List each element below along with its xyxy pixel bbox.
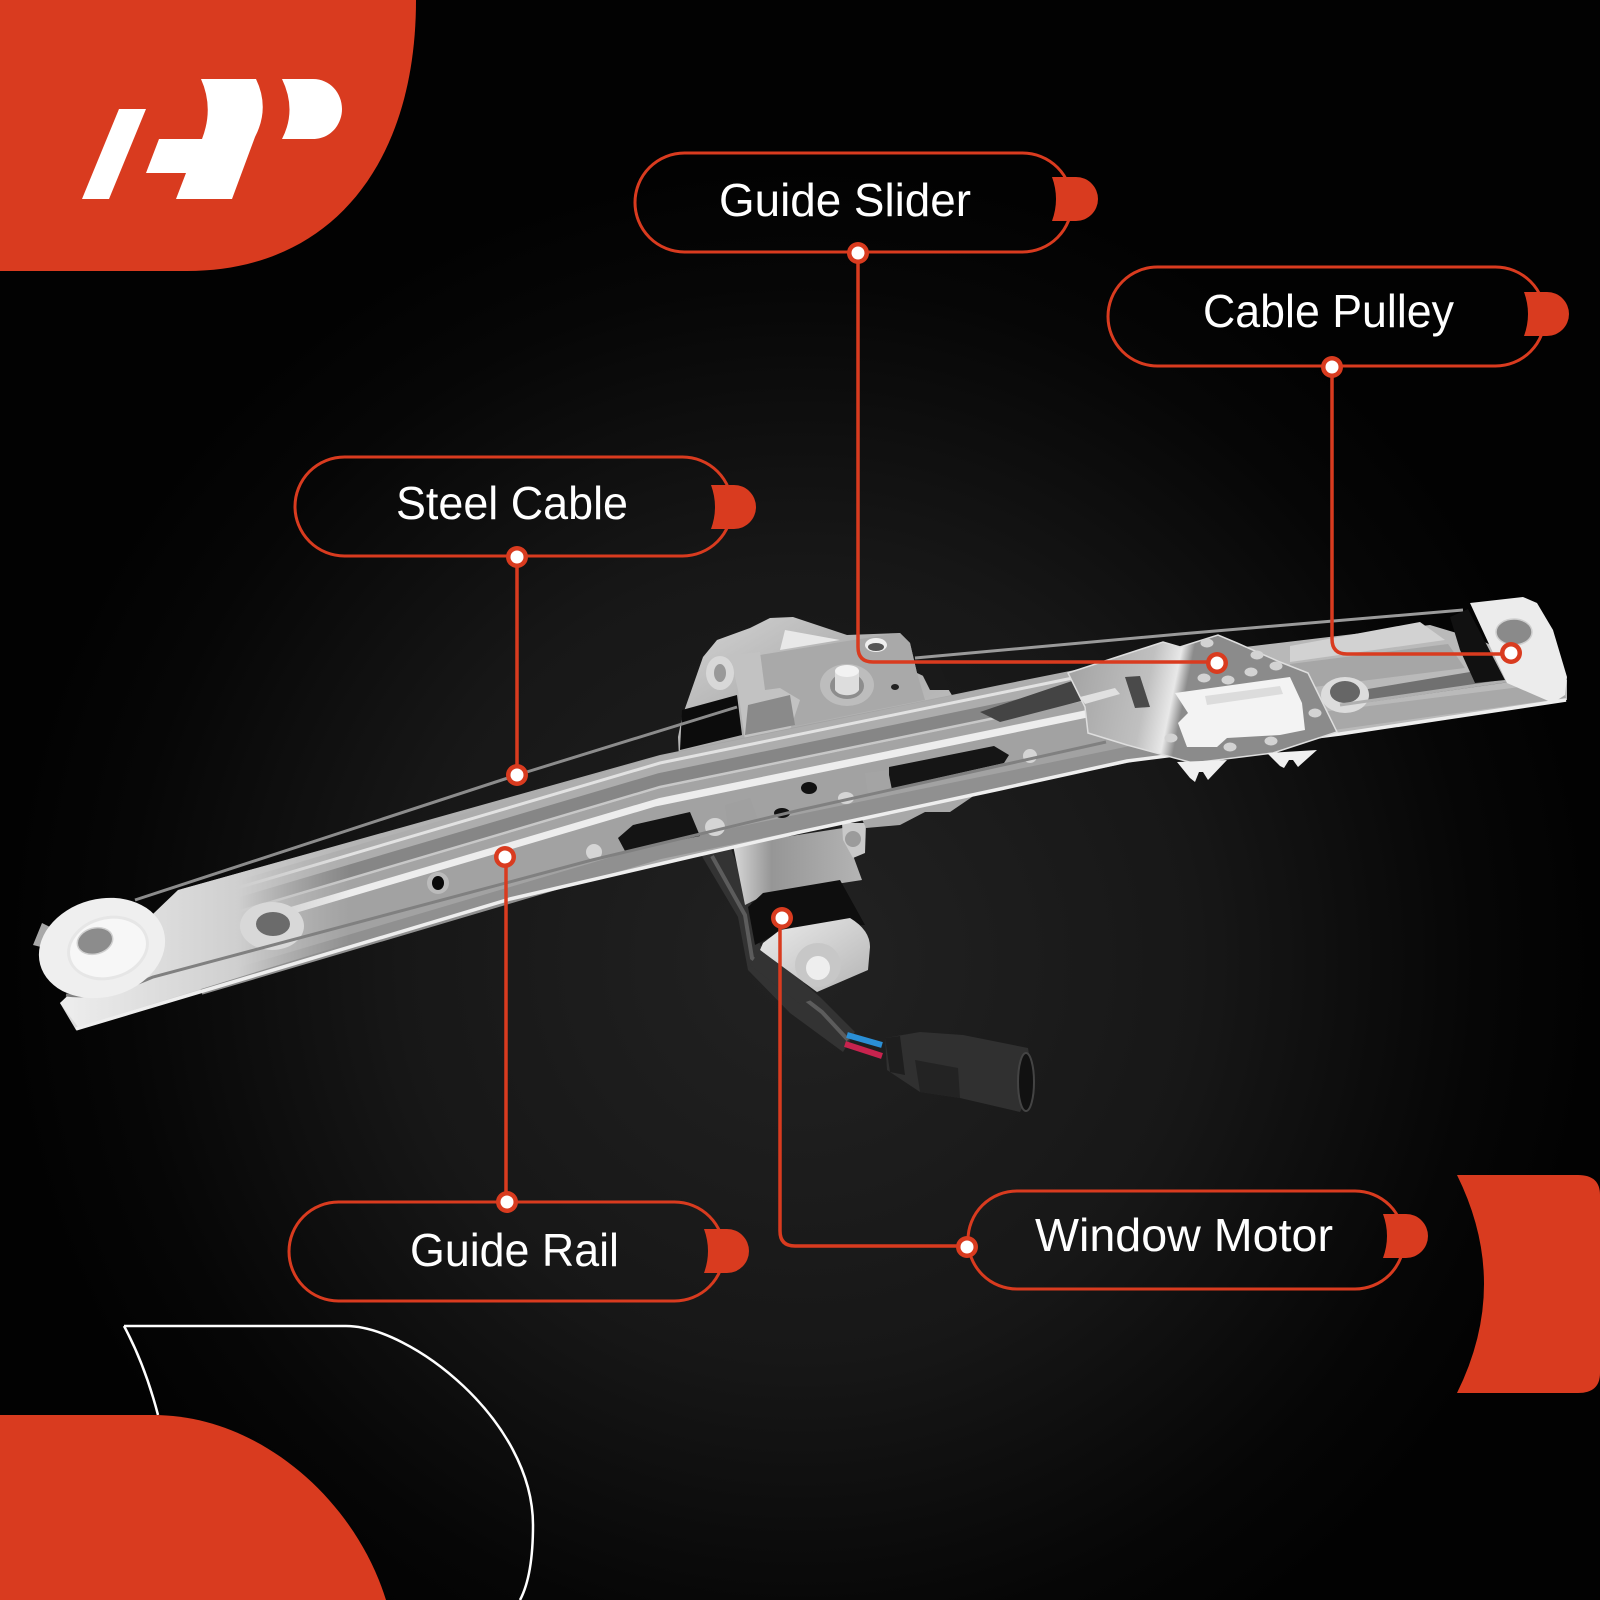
rail rivets (240, 677, 1369, 950)
callout: cable pulley (1108, 267, 1569, 664)
rail left end plate (60, 842, 350, 1027)
wiring connector (885, 1032, 1034, 1112)
callout: steel cable (295, 457, 756, 786)
rail dark band (980, 680, 1085, 722)
power cable (700, 846, 882, 1056)
callout: window motor: Window Motor (1035, 1209, 1333, 1261)
product: window regulator (27, 597, 1567, 1112)
corner shape: top left with logo (0, 0, 416, 271)
left cable pulley (27, 884, 177, 1012)
callout: steel cable: Steel Cable (396, 477, 628, 529)
right cable pulley (1450, 597, 1567, 703)
steel cable (66, 610, 1533, 996)
slider fixing dots (1164, 638, 1322, 752)
callout: guide rail (289, 846, 749, 1301)
rail channel bands (76, 660, 1566, 1029)
callout: guide slider (635, 153, 1228, 674)
decorative outline: bottom left (124, 1326, 533, 1600)
callout: window motor (771, 907, 1428, 1289)
callout: guide rail: Guide Rail (410, 1224, 619, 1276)
motor housing (733, 823, 870, 1004)
callout: guide slider: Guide Slider (719, 174, 971, 226)
rail slots (427, 746, 1037, 894)
callout: cable pulley: Cable Pulley (1203, 285, 1454, 337)
guide slider plate (1068, 635, 1337, 782)
motor bracket (678, 617, 953, 780)
slider clip teeth (1177, 750, 1317, 782)
icon: brand logo (82, 79, 342, 199)
corner shape: bottom left (0, 1415, 386, 1600)
lower pulley housing (860, 770, 978, 828)
rail right section (1290, 622, 1566, 736)
corner shape: right (1457, 1175, 1600, 1393)
guide rail (60, 622, 1567, 1030)
